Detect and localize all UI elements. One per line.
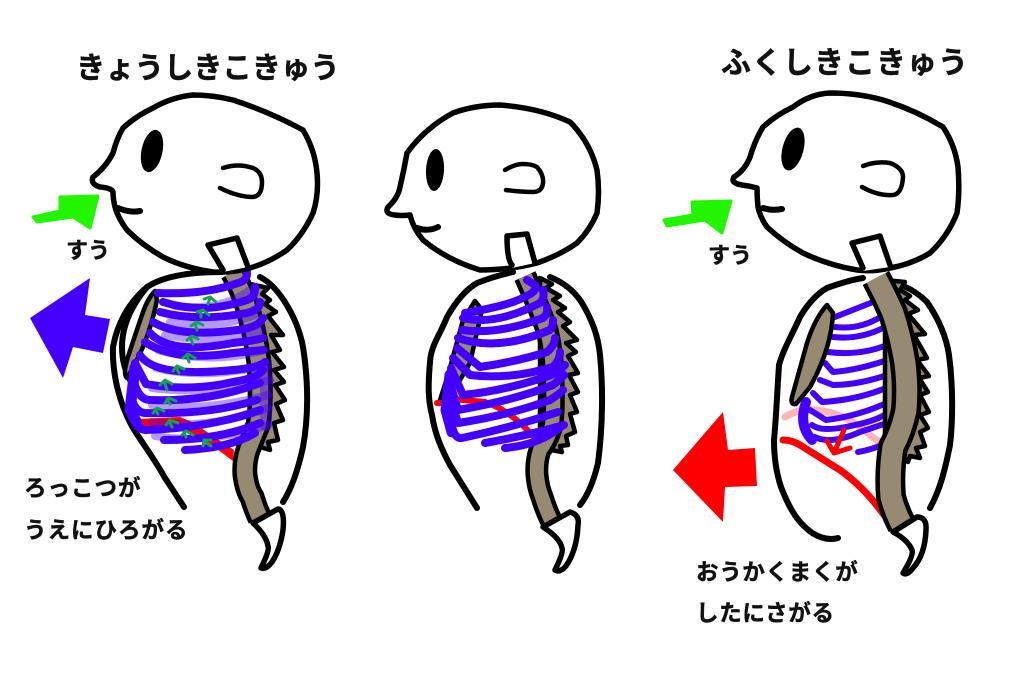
- sternum: [440, 301, 482, 400]
- title: abdominal breathing: ふくしきこきゅう: [721, 47, 969, 80]
- spine: [876, 278, 907, 525]
- ribs: [446, 280, 565, 448]
- label: suu (abdominal): すう: [708, 243, 752, 268]
- title: chest breathing: きょうしきこきゅう: [76, 52, 340, 85]
- small red down arrow: [827, 430, 850, 453]
- eye: [137, 128, 167, 174]
- neck outline: [507, 234, 535, 265]
- small green arrows: [153, 297, 216, 446]
- tailbone: [543, 512, 578, 571]
- neck: [208, 238, 248, 272]
- tailbone: [893, 517, 926, 574]
- diaphragm: [138, 417, 234, 461]
- mouth: [417, 227, 438, 230]
- figure: abdominal breathing skeleton: [733, 93, 959, 574]
- spinous processes: [885, 280, 929, 462]
- spinous processes: [250, 284, 285, 450]
- spinous processes: [540, 278, 578, 452]
- ear: [505, 164, 543, 192]
- figure: chest breathing skeleton: [92, 95, 318, 568]
- arrow: green breath in (abdominal): [664, 201, 731, 233]
- diaphragm lowered: [783, 440, 884, 515]
- neck: [507, 234, 535, 268]
- ear: [220, 166, 262, 197]
- spine: [232, 272, 260, 518]
- label: ribs spread upward: うえにひろがる: [24, 517, 189, 543]
- sternum: [125, 291, 157, 378]
- eye: [777, 125, 809, 173]
- torso outline: [774, 278, 952, 539]
- ribs: [130, 268, 265, 450]
- label: diaphragm lowers: したにさがる: [696, 600, 835, 626]
- diaphragm: [437, 399, 534, 437]
- neck: [852, 236, 890, 271]
- diaphragm relaxed (pale): [785, 410, 886, 445]
- ear: [862, 162, 903, 195]
- mouth: [763, 208, 782, 210]
- neck outline: [208, 238, 248, 270]
- head: [733, 93, 959, 271]
- head: [387, 105, 598, 270]
- torso outline: [113, 272, 307, 507]
- tailbone: [253, 509, 283, 568]
- label: diaphragm: おうかくまくが: [696, 559, 858, 585]
- mouth: [118, 208, 140, 212]
- ribs shadow: [152, 290, 270, 439]
- label: suu (chest): すう: [66, 238, 110, 263]
- torso outline: [429, 272, 602, 508]
- sternum: [792, 305, 833, 404]
- eye: [425, 149, 445, 191]
- label: ribs spread: ろっこつが: [24, 475, 142, 501]
- arrow: blue ribcage expansion: [30, 278, 110, 378]
- ribs: [803, 302, 893, 452]
- head: [92, 95, 318, 272]
- spine: [525, 276, 553, 520]
- arrow: green breath in (chest): [33, 196, 98, 228]
- neck outline: [852, 236, 890, 268]
- figure: resting skeleton: [387, 105, 602, 571]
- arrow: red abdomen expansion: [673, 412, 757, 522]
